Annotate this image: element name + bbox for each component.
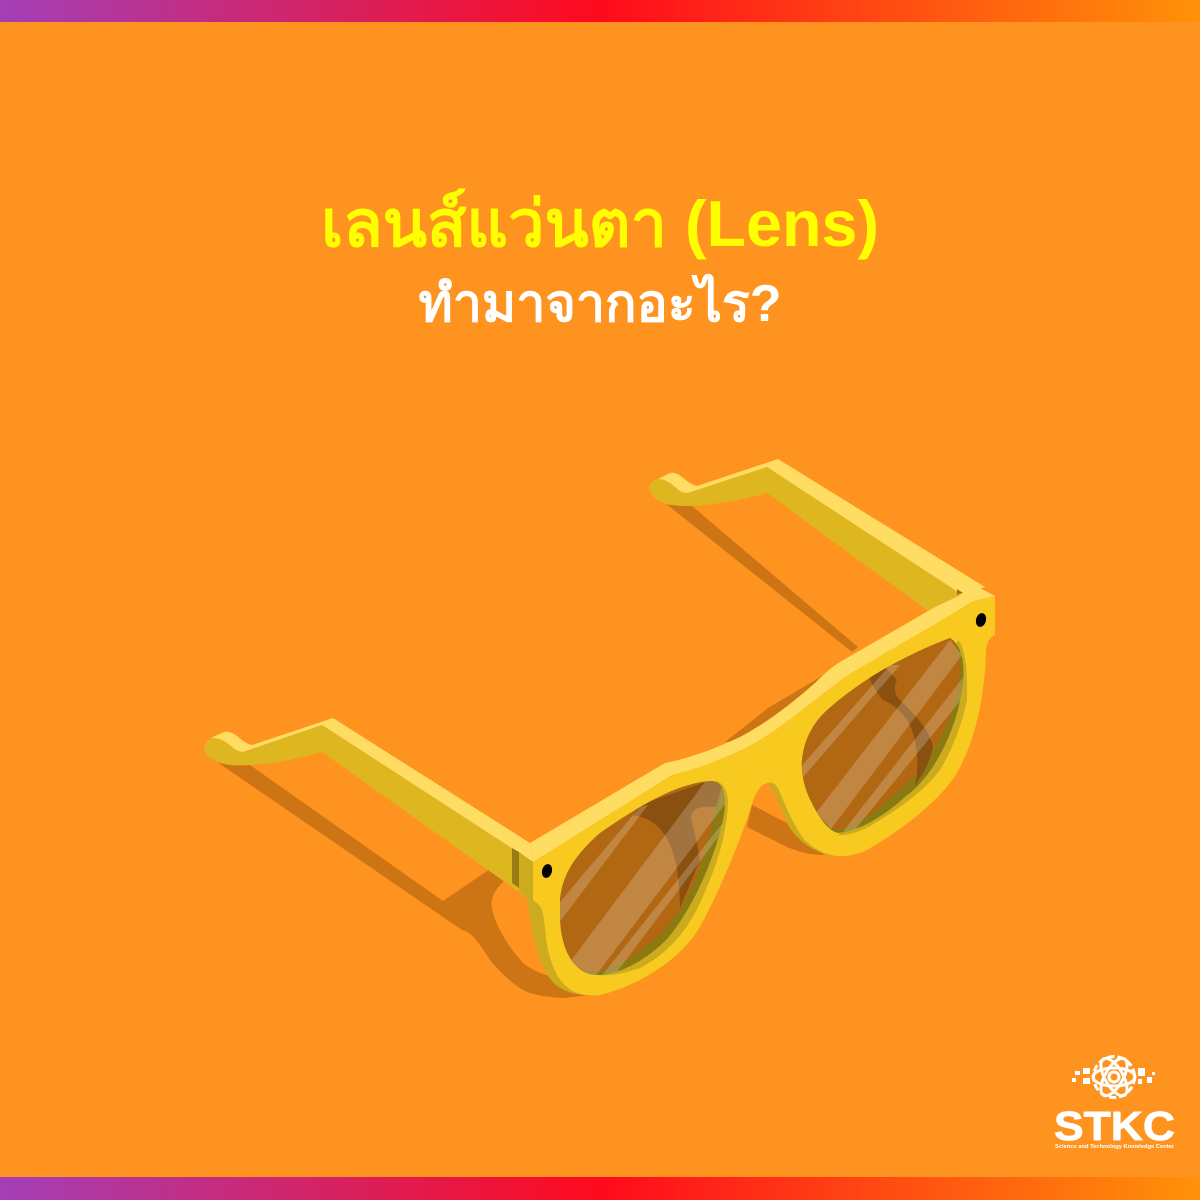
right lens stripes: [798, 640, 965, 833]
illustration: sunglasses: [204, 459, 995, 998]
right lens group: [802, 638, 968, 836]
hinge band: [519, 852, 533, 902]
right temple arm: [649, 459, 985, 614]
left temple arm: [204, 718, 533, 902]
shadow: below bridge: [747, 805, 825, 855]
hinge pin left: [540, 863, 554, 879]
shadow: left temple and lens: [217, 762, 590, 998]
logo tagline: Science and Technology Knowledge Center: [1055, 1144, 1174, 1150]
shadow: behind bridge: [725, 668, 840, 742]
left lens stripes: [555, 778, 728, 978]
right lens inner rim: [838, 640, 967, 835]
bottom gradient bar: [0, 1177, 1200, 1200]
frame outer side thickness: [527, 783, 860, 995]
hinge pin right: [974, 612, 988, 628]
logo atom icon: [1093, 1054, 1135, 1100]
left lens glass: [560, 781, 725, 975]
title: เลนส์แว่นตา (Lens): [321, 187, 879, 260]
left lens reflection: [633, 775, 725, 908]
right lens glass: [802, 638, 964, 833]
top gradient bar: [0, 0, 1200, 22]
logo wordmark: STKC: [1054, 1103, 1175, 1149]
left lens inner rim: [597, 781, 728, 975]
ground shadows: [217, 503, 858, 998]
subtitle: ทำมาจากอะไร?: [418, 275, 782, 333]
frame top highlight: [530, 587, 995, 862]
shadow: right temple: [665, 503, 858, 652]
left lens group: [560, 781, 728, 976]
logo pixel squares: [1072, 1068, 1155, 1084]
right lens reflection: [868, 667, 933, 785]
frame front: [533, 596, 995, 995]
